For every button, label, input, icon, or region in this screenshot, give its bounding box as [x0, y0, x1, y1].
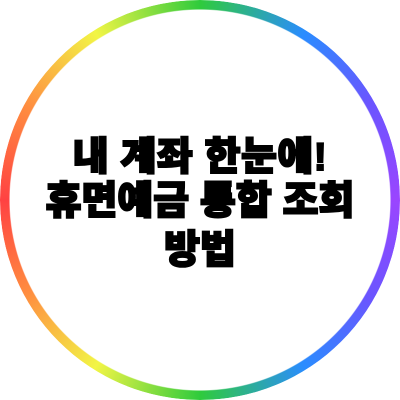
- title: [46, 136, 354, 272]
- title line 3: 방법: [164, 229, 236, 272]
- title line 2: 휴면예금 통합 조회: [46, 180, 354, 223]
- title line 1: 내 계좌 한눈에!: [73, 136, 327, 179]
